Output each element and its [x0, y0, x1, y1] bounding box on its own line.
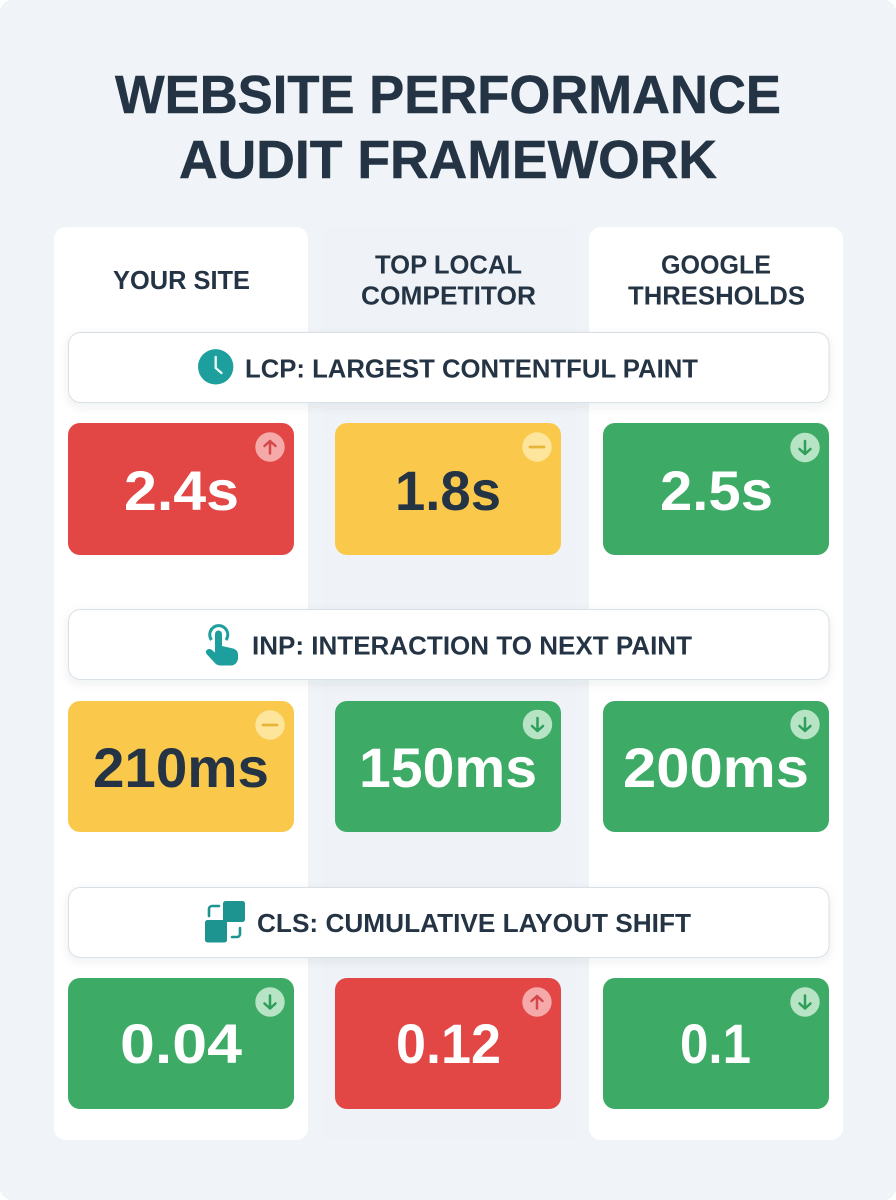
badge: up arrow: [255, 432, 285, 462]
value card: competitor LCP: 1.8s: [395, 459, 501, 522]
badge: down arrow: [790, 433, 820, 462]
value card: threshold CLS: [603, 978, 829, 1109]
value card: competitor CLS: 0.12: [396, 1012, 501, 1075]
heading: google thresholds: [628, 252, 805, 310]
icon: tapping hand: [206, 626, 238, 666]
badge: dash: [255, 710, 285, 740]
metric band: LCP: [68, 332, 829, 402]
band label: LCP: LCP: LARGEST CONTENTFUL PAINT: [245, 354, 698, 384]
value card: your site LCP: 2.4s: [124, 459, 239, 522]
heading: top local competitor: [361, 252, 536, 310]
value card: threshold INP: [603, 701, 829, 832]
value card: your site INP: 210ms: [93, 736, 269, 799]
value card: competitor INP: 150ms: [359, 736, 537, 799]
title: WEBSITE PERFORMANCE: [115, 65, 781, 125]
icon: clock: [198, 349, 233, 384]
value card: competitor INP: [335, 701, 561, 832]
metric band: CLS: [68, 888, 829, 958]
metric band: INP: [68, 610, 829, 680]
value card: threshold LCP: [603, 423, 829, 555]
heading: top local competitor: TOP LOCAL: [375, 252, 522, 280]
title: [115, 65, 781, 190]
value card: threshold CLS: 0.1: [680, 1012, 751, 1075]
value card: threshold INP: 200ms: [623, 736, 809, 799]
panel: top local competitor column: [322, 227, 575, 1140]
heading: your site: YOUR SITE: [113, 267, 250, 295]
icon: shifting squares: [205, 901, 245, 942]
badge: dash: [522, 432, 552, 462]
value card: competitor CLS: [335, 978, 561, 1109]
badge: down arrow: [790, 710, 820, 739]
value card: your site LCP: [68, 423, 294, 555]
value card: competitor LCP: [335, 423, 561, 555]
title: AUDIT FRAMEWORK: [179, 130, 717, 190]
value card: your site INP: [68, 701, 294, 832]
band label: CLS: CLS: CUMULATIVE LAYOUT SHIFT: [257, 908, 691, 938]
badge: down arrow: [790, 987, 820, 1017]
badge: down arrow: [523, 710, 552, 739]
heading: top local competitor: COMPETITOR: [361, 282, 536, 310]
value card: your site CLS: [68, 978, 294, 1109]
value card: your site CLS: 0.04: [120, 1012, 242, 1075]
panel: google thresholds column: [589, 227, 843, 1140]
panel: your site column: [54, 227, 308, 1140]
badge: down arrow: [255, 987, 285, 1017]
band label: INP: INP: INTERACTION TO NEXT PAINT: [252, 630, 692, 660]
heading: google thresholds: GOOGLE: [661, 252, 771, 280]
value card: threshold LCP: 2.5s: [660, 459, 773, 522]
badge: up arrow: [522, 987, 552, 1017]
heading: google thresholds: THRESHOLDS: [628, 282, 805, 310]
